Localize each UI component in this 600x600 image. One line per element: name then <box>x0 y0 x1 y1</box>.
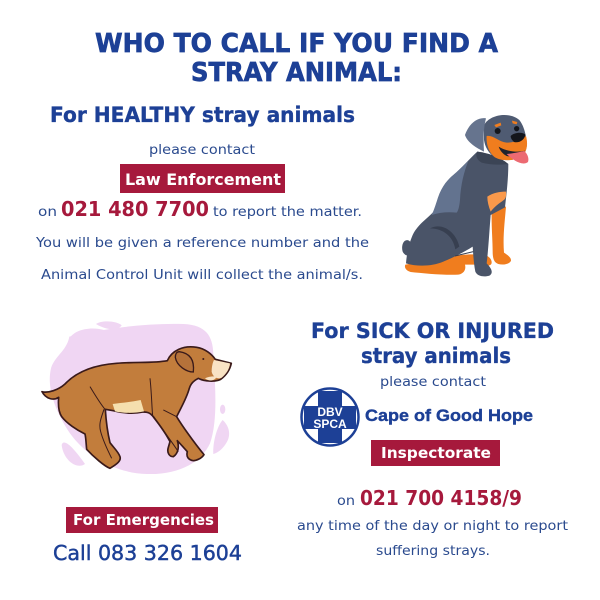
phone line: inspectorate: on <box>337 494 355 509</box>
text: please contact: please contact <box>380 375 486 390</box>
icon: injured dog on pink blob <box>42 321 231 474</box>
label: For Emergencies <box>66 507 218 533</box>
text: any time <box>297 519 568 559</box>
panel: sick or injured stray animals <box>297 319 568 559</box>
logo: DBV SPCA: SPCA <box>313 417 347 431</box>
label: Law Enforcement <box>120 164 285 193</box>
label: Inspectorate <box>371 440 500 466</box>
heading: healthy: For HEALTHY stray animals <box>50 103 355 127</box>
text: reference number <box>35 236 369 283</box>
logo: DBV SPCA <box>302 388 358 446</box>
phone line: inspectorate: 021 700 4158/9 <box>360 486 522 510</box>
heading: sick or injured: For SICK OR INJURED <box>311 319 554 343</box>
title <box>95 29 498 88</box>
label: Law Enforcement: Law Enforcement <box>125 170 281 189</box>
heading: sick or injured: stray animals <box>361 344 511 368</box>
phone line: law enforcement: on <box>38 205 57 220</box>
phone line: law enforcement: to report the matter. <box>213 205 362 220</box>
label: For Emergencies: For Emergencies <box>73 511 214 529</box>
logo text: Cape of Good Hope: Cape of Good Hope <box>365 406 533 425</box>
text: any time: any time of the day or night to report <box>297 519 568 534</box>
title: WHO TO CALL IF YOU FIND A <box>95 29 498 59</box>
title: STRAY ANIMAL: <box>191 58 402 88</box>
phone line: law enforcement: 021 480 7700 <box>61 197 209 221</box>
text: reference number: You will be given a reference number and the <box>35 236 369 251</box>
panel: healthy stray animals <box>35 103 369 283</box>
logo: DBV SPCA: DBV <box>317 405 343 419</box>
text: please contact: please contact <box>149 143 255 158</box>
text: reference number: Animal Control Unit will collect the animal/s. <box>41 268 363 283</box>
phone line: law enforcement <box>38 197 362 221</box>
label: Inspectorate: Inspectorate <box>381 444 491 462</box>
icon: sitting rottweiler <box>402 115 528 276</box>
phone: emergencies: Call 083 326 1604 <box>53 541 242 565</box>
heading: sick or injured <box>311 319 554 368</box>
panel: emergencies <box>53 507 242 565</box>
text: any time: suffering strays. <box>376 544 490 559</box>
